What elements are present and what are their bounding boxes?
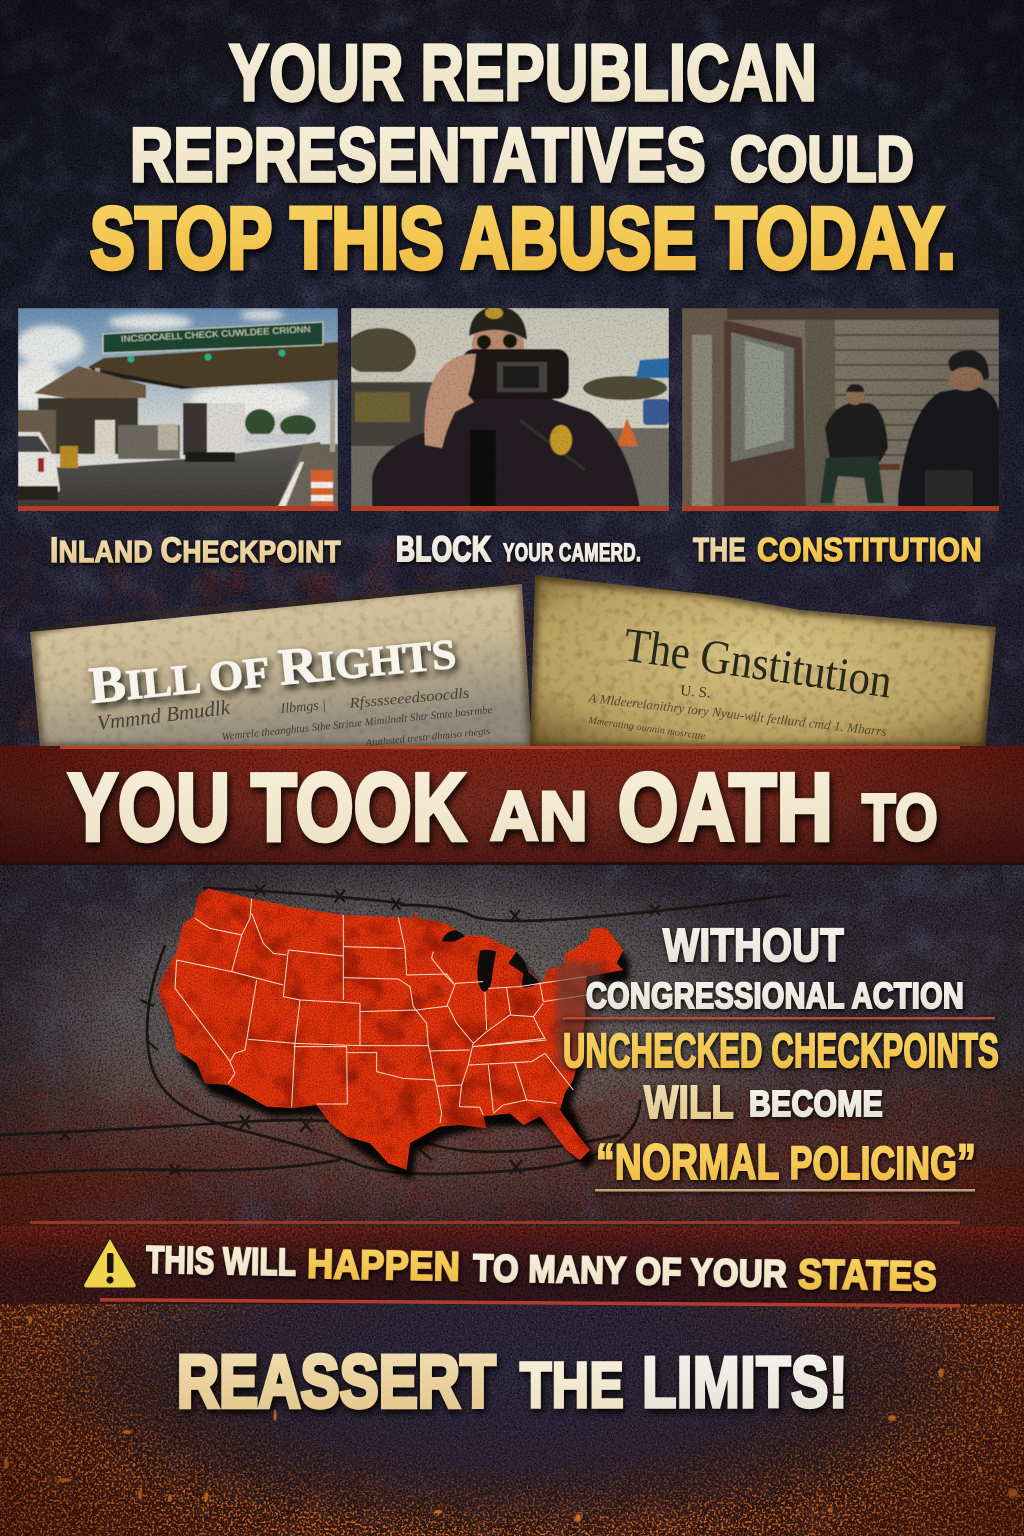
call to action [177,1340,848,1423]
document title: The Gnstitution [620,618,895,708]
warning message [146,1237,938,1300]
clouds [10,310,310,416]
trees [344,328,667,400]
trees [245,409,316,437]
without: WITHOUT [663,919,844,971]
banner text: YOU TOOK [68,754,466,861]
banner text: OATH [618,754,833,861]
warning message: HAPPEN [307,1241,461,1289]
warning message: THIS WILL [146,1239,297,1284]
map shadow [164,898,629,1180]
canopy posts [95,368,335,452]
siding [835,335,999,455]
camera [462,349,569,399]
canopy [88,342,338,388]
white pickup [18,432,60,500]
asphalt [351,428,669,511]
fade behind map text [556,962,602,1067]
door [724,320,806,508]
will become: BECOME [749,1083,883,1124]
photo: officers outside door [682,308,999,511]
blue car [643,399,669,425]
call to action: REASSERT [177,1340,496,1423]
warning banner [0,1221,1024,1308]
glasses [477,334,517,349]
manuscript writing [96,686,493,749]
photo captions [50,530,982,570]
barbs [60,885,660,1175]
standing officer [898,350,1000,511]
title line 2: REPRESENTATIVES [130,113,706,198]
call to action: THE [520,1349,624,1421]
banner text [68,754,938,861]
jacket [372,395,640,511]
photo: inland checkpoint [18,308,338,511]
manuscript writing: A Mldeerelanithry tory Nyuu-wilt fetllurd cmd 1. Mbarrs [587,690,887,739]
state borders [175,898,587,1123]
manuscript writing: Vmmnd Bmudlk [96,695,232,735]
large sparks [4,1316,1018,1522]
booth [34,366,146,398]
caption: block your camerd [396,530,641,569]
will become [644,1076,883,1128]
warning message: STATES [798,1250,938,1300]
manuscript writing: Ilbmgs | [279,698,327,717]
divider [563,1017,995,1020]
caption: the constitution: CONSTITUTION [757,531,982,568]
caption: inland checkpoint: INLAND CHECKPOINT [50,531,341,570]
cap [469,306,527,340]
caption: block your camerd: YOUR CAMERD. [503,539,641,567]
face [472,320,524,370]
hand [424,354,476,448]
banner text: TO [862,780,938,854]
great lakes [442,930,539,992]
call to action: LIMITS! [642,1343,848,1423]
icon: warning triangle [84,1238,136,1288]
sign [103,322,323,353]
seated officer [820,384,900,503]
normal policing: “NORMAL POLICING” [596,1134,976,1190]
building [351,378,446,446]
title line 2: COULD [730,123,914,195]
map fill [158,888,623,1170]
caption: block your camerd: BLOCK [396,530,491,569]
truck [183,403,207,455]
map: United States [158,888,623,1170]
manuscript writing: Wemrele theanghtus Sthe Stritue Mimilnalt Shtr Stnte bosrmbe [221,704,493,743]
signal lights [128,350,286,362]
document: the constitution [530,575,996,748]
photo: officer blocking camera [351,308,669,511]
manuscript writing: Atuthsted trestr dbmiso rhegts [364,726,491,749]
officer [372,306,640,511]
title [90,28,956,287]
subtitle: U. S. [680,683,711,702]
badge [550,425,572,455]
traffic cones [380,418,638,511]
document: bill of rights [30,584,532,749]
manuscript writing: Rfsssseeedsoocdls [348,686,470,712]
blue awning [636,358,669,378]
document title: BILL OF RIGHTS [87,623,458,715]
banner text: AN [490,777,588,855]
red oath banner [0,746,1024,865]
will become: WILL [644,1076,734,1128]
photo: inland checkpoint: INCSOCAELL CHECK CUWLDEE CRIONN [121,324,311,344]
warning text block [563,919,999,1192]
divider [595,1189,975,1192]
traffic barrel [311,470,333,511]
manuscript writing: Mmerating ounnin mosrcttte [587,715,707,742]
caption: the constitution: THE [693,531,746,568]
title line 1: YOUR REPUBLICAN [229,28,817,117]
warning message: TO MANY OF YOUR [473,1248,787,1296]
barbed wire [0,885,790,1175]
road [18,442,338,511]
